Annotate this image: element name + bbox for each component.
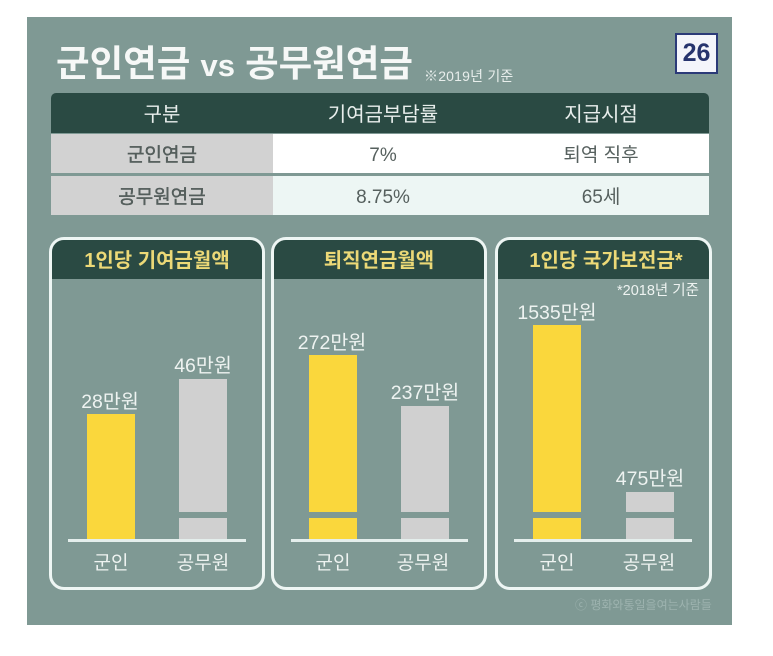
label: soldier: 군인 <box>94 553 128 574</box>
label: civil servant: 공무원 <box>397 553 449 574</box>
row 2 rate: 8.75% <box>356 187 410 208</box>
row 1 value cells <box>273 134 709 173</box>
panel: retirement pension <box>271 237 487 590</box>
axis 1 <box>68 539 246 542</box>
panel: contribution per person <box>49 237 265 590</box>
bar: civil servant 475 lower <box>626 518 674 540</box>
panel heading <box>498 240 709 279</box>
bar: civil servant 46 lower <box>179 518 227 540</box>
header: category: 구분 <box>144 104 180 126</box>
comparison table <box>51 93 709 215</box>
label: civil servant: 공무원 <box>177 553 229 574</box>
label: soldier: 군인 <box>540 553 574 574</box>
title: 군인연금 vs 공무원연금 <box>56 43 413 84</box>
bar: soldier 272 upper <box>309 355 357 512</box>
label: civil servant: 공무원 <box>623 553 675 574</box>
row 2 value cells <box>273 176 709 215</box>
value: 475: 475만원 <box>616 468 684 490</box>
panel heading <box>274 240 484 279</box>
value: 28: 28만원 <box>81 391 139 413</box>
bar: soldier 272 lower <box>309 518 357 540</box>
note: 2018 basis: *2018년 기준 <box>617 283 699 299</box>
page number badge: 26 <box>683 39 710 67</box>
row 1 rate: 7% <box>369 145 397 166</box>
value: 237: 237만원 <box>391 382 459 404</box>
bar: civil servant 237 lower <box>401 518 449 540</box>
bar: soldier 1535 lower <box>533 518 581 540</box>
label: soldier: 군인 <box>316 553 350 574</box>
bar: soldier 28 <box>87 414 135 540</box>
row 1 timing: 퇴역 직후 <box>563 145 639 166</box>
panel: state subsidy <box>495 237 712 590</box>
value: 1535: 1535만원 <box>517 302 597 324</box>
bar: civil servant 237 upper <box>401 406 449 512</box>
row 1 label: 군인연금 <box>127 145 197 166</box>
credit: ⓒ 평화와통일을여는사람들 <box>575 598 712 612</box>
row 1 label cell <box>51 134 273 173</box>
row 2 timing: 65세 <box>582 187 620 208</box>
panel heading: 1인당 기여금월액 <box>84 250 230 272</box>
row 2 label cell <box>51 176 273 215</box>
header: contribution rate: 기여금부담률 <box>328 104 438 126</box>
value: 272: 272만원 <box>298 332 366 354</box>
bar: civil servant 46 upper <box>179 379 227 512</box>
row 2 label: 공무원연금 <box>118 187 206 208</box>
axis 2 <box>291 539 468 542</box>
panel heading <box>52 240 262 279</box>
bar: civil servant 475 upper <box>626 492 674 512</box>
value: 46: 46만원 <box>174 355 232 377</box>
axis 3 <box>514 539 692 542</box>
panel heading: 퇴직연금월액 <box>324 250 434 272</box>
note: 2019 basis: ※2019년 기준 <box>424 68 513 84</box>
page number badge <box>675 33 718 74</box>
panel heading: 1인당 국가보전금* <box>529 250 683 272</box>
header: payment start: 지급시점 <box>564 104 638 126</box>
bar: soldier 1535 upper <box>533 325 581 512</box>
table header row <box>51 93 709 133</box>
